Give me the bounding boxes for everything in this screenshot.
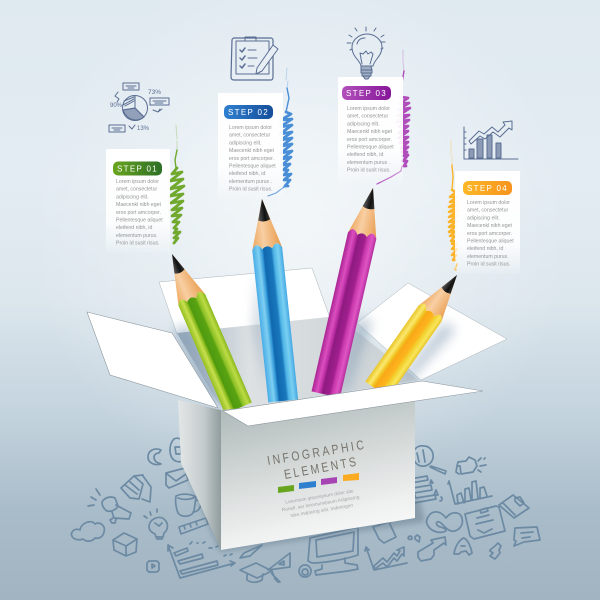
step 02 text: Maecenkl nibh eget <box>229 148 275 154</box>
box: left side <box>178 400 221 550</box>
step 01 text: Proin id susit risus. <box>116 241 160 247</box>
step 04 text: Proin id susit risus. <box>467 262 511 268</box>
pencil shadows <box>172 270 455 405</box>
icon: pie chart sketch: 13% <box>137 126 150 132</box>
step 03 text: adipiscing elit. <box>347 121 380 127</box>
step 04 label: STEP 04 <box>467 184 508 193</box>
icon: bar chart sketch <box>464 121 518 159</box>
scribble: green <box>170 125 184 243</box>
step 02 text: adipiscing elit. <box>229 140 262 146</box>
step 03 text: eros port amcorper. <box>347 137 392 143</box>
pencil: blue <box>247 197 298 402</box>
card: step 01 <box>106 149 170 252</box>
step 01 text: eleifend nibh, id <box>116 225 152 231</box>
step 04 text: elementum purus. <box>467 254 509 260</box>
step 02 text: amet, consectetur <box>229 133 271 139</box>
step 02 text: Proin id susit risus. <box>229 187 273 193</box>
step 01 text: amet, consectetur <box>116 187 158 193</box>
step 03 text: Pellentesque aliquet <box>347 144 394 150</box>
icon: pie chart sketch: 90% <box>110 103 123 109</box>
icon: light bulb sketch <box>347 27 385 79</box>
step 02 text: eleifend nibh, id <box>229 171 265 177</box>
step 03 text: Proin id susit risus. <box>347 168 391 174</box>
step 03 text: elementum purus . <box>347 160 390 166</box>
step 04 text: Lorem ipsum dolor <box>467 200 510 206</box>
box: interior <box>177 317 418 411</box>
step 03 text: Maecenkl nibh eget <box>347 129 393 135</box>
scribble: blue <box>268 68 292 196</box>
step 01 label: STEP 01 <box>117 164 158 174</box>
step 01 text: Pellentesque aliquet <box>116 218 163 224</box>
scribble: purple <box>377 50 410 184</box>
step 01 text: Lorem ipsum dolor <box>116 179 159 185</box>
step 02 label: STEP 02 <box>228 108 269 117</box>
step 04 text: amet, consectetur <box>467 208 509 214</box>
card: step 02 <box>218 93 283 198</box>
step 01 text: elementum purus. <box>116 233 158 239</box>
card: step 04 <box>455 171 520 274</box>
pencil: magenta <box>312 185 387 398</box>
step 01 text: eros port amcorper. <box>116 210 161 216</box>
step 03 text: eleifend nibh, id <box>347 152 383 158</box>
step 04 text: eros port amcorper. <box>467 231 512 237</box>
step 02 text: Pellentesque aliquet <box>229 164 276 170</box>
step 03 label: STEP 03 <box>346 89 387 98</box>
box caption: take indpicing ielit. Inderingen <box>290 503 354 519</box>
step 04 text: adipiscing elit. <box>467 215 500 221</box>
box title: ELEMENTS: ELEMENTS <box>283 454 360 482</box>
box drop shadow <box>185 470 425 552</box>
floor doodles: left group <box>71 438 280 582</box>
box caption: Loremium ipsumipsum dolor site <box>285 488 354 506</box>
floor doodles: centre and right group <box>240 446 540 577</box>
box: front flap <box>223 381 483 426</box>
step 02 text: Lorem ipsum dolor <box>229 125 272 131</box>
box title: INFOGRAPHIC: INFOGRAPHIC <box>266 438 368 468</box>
box: back flap <box>159 268 330 334</box>
icon: clipboard sketch <box>231 37 278 80</box>
step 04 text: Pellentesque aliquet <box>467 238 514 244</box>
pencil: green <box>159 248 252 414</box>
step 02 text: elementum purus . <box>229 179 272 185</box>
step 01 text: Maecenkl nibh eget <box>116 202 162 208</box>
box: front face <box>221 392 415 550</box>
box: left flap <box>87 312 218 408</box>
box caption: Ronell, ser loremumipsum Adipiscing <box>281 494 360 513</box>
step 03 text: amet, consectetur <box>347 114 389 120</box>
step 01 text: adipiscing elit. <box>116 194 149 200</box>
step 04 text: eleifend nibh, id <box>467 246 503 252</box>
step 02 text: eros port amcorper. <box>229 156 274 162</box>
icon: pie chart sketch <box>109 83 169 132</box>
scribble: orange <box>449 140 459 270</box>
card: step 03 <box>338 77 403 182</box>
icon: pie chart sketch: 73% <box>148 89 161 96</box>
box: right flap <box>357 283 507 380</box>
step 04 text: Maecenkl nibh eget <box>467 223 513 229</box>
colour bars <box>278 473 359 493</box>
pencil: yellow <box>365 267 468 398</box>
step 03 text: Lorem ipsum dolor <box>347 106 390 112</box>
